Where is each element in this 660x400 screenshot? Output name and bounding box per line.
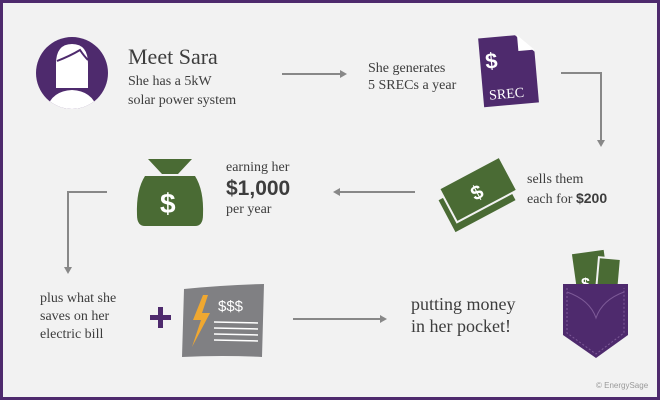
arrow: elbow down left <box>64 192 107 274</box>
arrow: to SREC <box>282 70 347 78</box>
icon: SREC document: $ <box>484 48 498 74</box>
icon: money bag <box>137 159 203 226</box>
text: plus savings: saves on her <box>40 309 109 324</box>
text: system <box>128 74 236 108</box>
text: pocket <box>411 294 516 336</box>
icon: cash <box>434 157 521 232</box>
text: sells <box>527 172 607 207</box>
icon: pocket with cash <box>563 250 628 358</box>
icon: avatar <box>36 37 108 112</box>
text: earning: per year <box>226 202 271 217</box>
heading: Meet Sara: Meet Sara <box>128 44 218 69</box>
text: system: solar power system <box>128 93 236 108</box>
text: system: She has a 5kW <box>128 74 212 89</box>
text: sells: sells them <box>527 172 583 187</box>
text: plus savings: electric bill <box>40 327 103 342</box>
icon: cash: $ <box>467 181 487 206</box>
icon: electric bill <box>182 284 264 357</box>
text: earning: earning her <box>226 160 289 175</box>
icon: SREC document: SREC <box>489 86 525 104</box>
icon: plus <box>150 307 171 328</box>
text: sells: each for $200 <box>527 190 607 207</box>
text: earning <box>226 160 290 217</box>
icon: electric bill: $$$ <box>218 298 244 315</box>
text: earning: $1,000 <box>226 177 290 200</box>
text: plus savings <box>40 291 116 342</box>
arrow: to money bag <box>333 188 415 196</box>
text: plus savings: plus what she <box>40 291 116 306</box>
arrow: elbow down <box>561 73 605 147</box>
arrow: to pocket <box>293 315 387 323</box>
text: pocket: putting money <box>411 294 516 314</box>
text: pocket: in her pocket! <box>411 316 511 336</box>
text: SRECs <box>368 61 456 93</box>
text: SRECs: 5 SRECs a year <box>368 78 456 93</box>
credit: © EnergySage <box>596 381 648 390</box>
text: SRECs: She generates <box>368 61 445 76</box>
icon: SREC document <box>478 34 539 107</box>
icon: money bag: $ <box>160 188 176 219</box>
icon: pocket with cash: $ <box>581 276 590 293</box>
